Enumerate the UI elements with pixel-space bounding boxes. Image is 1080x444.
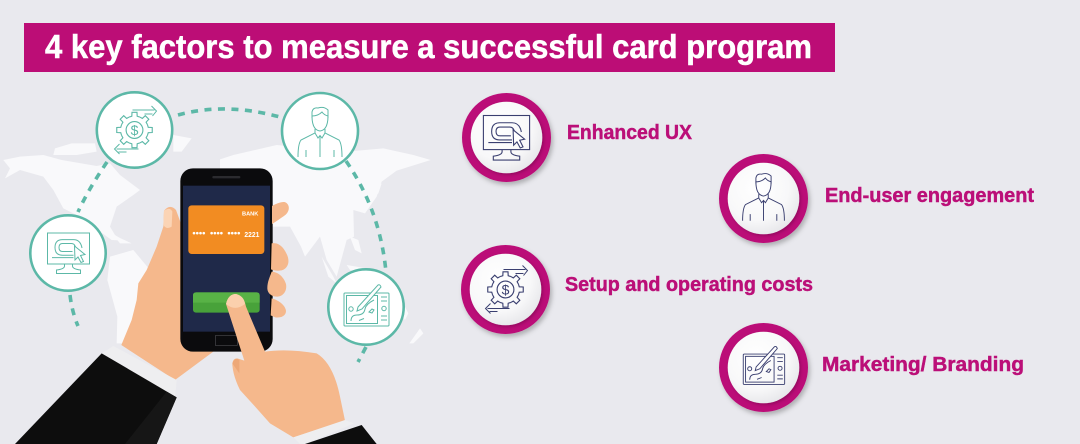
factor: Setup and operating costs: Setup and operating costs [565, 274, 813, 296]
left sleeve and cuff [15, 346, 177, 444]
icon: gear with dollar, teal circle: $ [131, 122, 139, 138]
icon: gear with dollar, teal circle [97, 92, 172, 168]
bank card: BANK [242, 212, 259, 218]
icon: drawing tablet, teal circle [328, 269, 404, 345]
bank card: •••• [227, 228, 240, 238]
world map [3, 135, 431, 343]
bank card: •••• [210, 228, 223, 238]
right hand with pointing finger [226, 294, 345, 437]
factor: End-user engagement [719, 154, 1034, 243]
phone [180, 168, 273, 352]
bank card: 2221 [244, 230, 259, 239]
icon: person, teal circle [282, 93, 358, 169]
left hand fingers [267, 202, 289, 317]
bank card [188, 205, 264, 254]
green pay button [193, 292, 260, 313]
right sleeve and cuff [293, 420, 377, 444]
dashed connector arcs [70, 109, 386, 362]
panel: phone illustration [3, 92, 431, 444]
title banner: 4 key factors to measure a successful card program [45, 28, 812, 65]
factor: Enhanced UX: Enhanced UX [567, 122, 693, 144]
factor: End-user engagement: End-user engagement [825, 185, 1034, 207]
factor: Marketing/ Branding [719, 323, 1024, 412]
factor: Marketing/ Branding: Marketing/ Branding [822, 354, 1024, 376]
icon: monitor, teal circle [30, 215, 106, 291]
bank card: •••• [192, 228, 205, 238]
factor: Enhanced UX [462, 93, 693, 182]
factor: Setup and operating costs [461, 245, 813, 334]
factor: Setup and operating costs: $ [502, 282, 510, 298]
left hand back [121, 207, 213, 380]
